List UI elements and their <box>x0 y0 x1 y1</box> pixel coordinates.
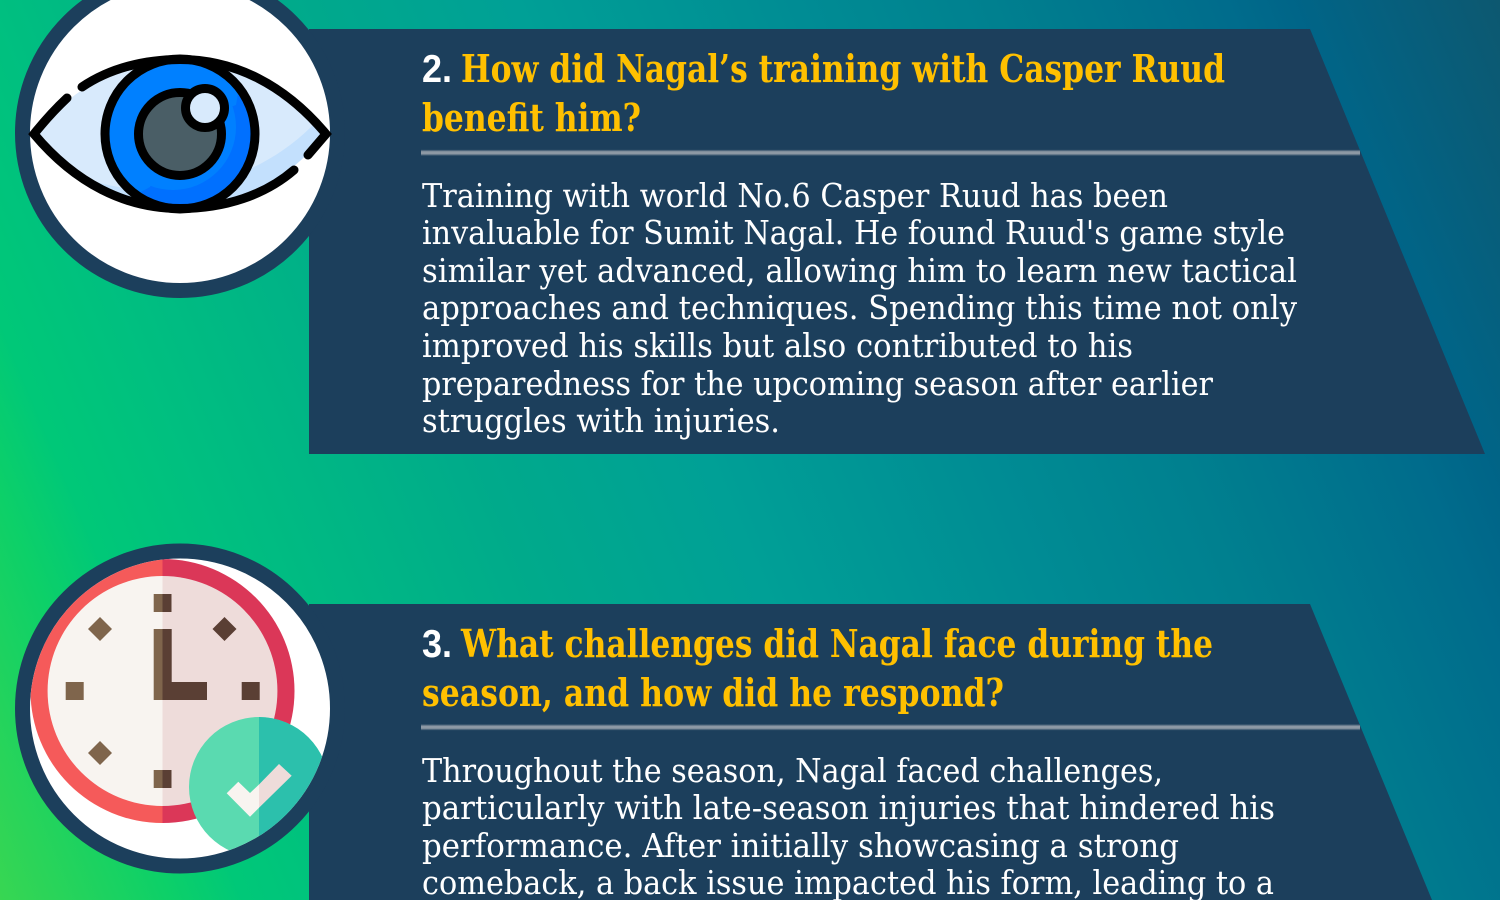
heading: question 3 <box>422 621 1213 715</box>
pupil <box>138 92 222 176</box>
body text: question 2: preparedness for the upcoming season after earlier <box>422 364 1213 403</box>
body text: question 2: similar yet advanced, allowing him to learn new tactical <box>422 251 1297 290</box>
icon: eye in circle <box>22 0 340 290</box>
eye white <box>34 60 326 208</box>
highlight <box>186 88 224 128</box>
clock face <box>48 576 162 806</box>
body text: question 2: Training with world No.6 Casper Ruud has been <box>422 176 1168 215</box>
body text: question 3: performance. After initially showcasing a strong <box>422 826 1179 865</box>
body text: question 3: Throughout the season, Nagal faced challenges, <box>422 751 1163 790</box>
heading: question 2: How did Nagal’s training with Casper Ruud <box>461 46 1225 91</box>
heading: question 2: benefit him? <box>422 95 641 140</box>
heading: question 3: What challenges did Nagal face during the <box>460 621 1213 666</box>
heading: question 3: season, and how did he respond? <box>422 670 1004 715</box>
eye outline <box>34 60 326 208</box>
heading: question 2: 2. <box>422 48 452 91</box>
body text: question 2: improved his skills but also contributed to his <box>422 326 1133 365</box>
heading: question 3: 3. <box>422 623 452 666</box>
icon: clock with check <box>22 551 338 866</box>
body text: question 2 <box>422 176 1297 440</box>
hour marks and hands right <box>162 594 260 788</box>
eye lower shade <box>100 126 320 199</box>
body text: question 2: invaluable for Sumit Nagal. He found Ruud's game style <box>422 213 1285 252</box>
hour marks and hands left <box>66 594 163 788</box>
body text: question 3 <box>422 751 1275 900</box>
panel: question 3 <box>309 604 1432 900</box>
check badge <box>189 717 329 857</box>
body text: question 3: particularly with late-season injuries that hindered his <box>422 788 1275 827</box>
clock rim <box>31 559 163 823</box>
panel: question 2 <box>309 29 1485 454</box>
body text: question 2: approaches and techniques. Spending this time not only <box>422 288 1297 327</box>
body text: question 2: struggles with injuries. <box>422 401 780 440</box>
iris <box>100 54 255 214</box>
heading: question 2 <box>422 46 1225 140</box>
